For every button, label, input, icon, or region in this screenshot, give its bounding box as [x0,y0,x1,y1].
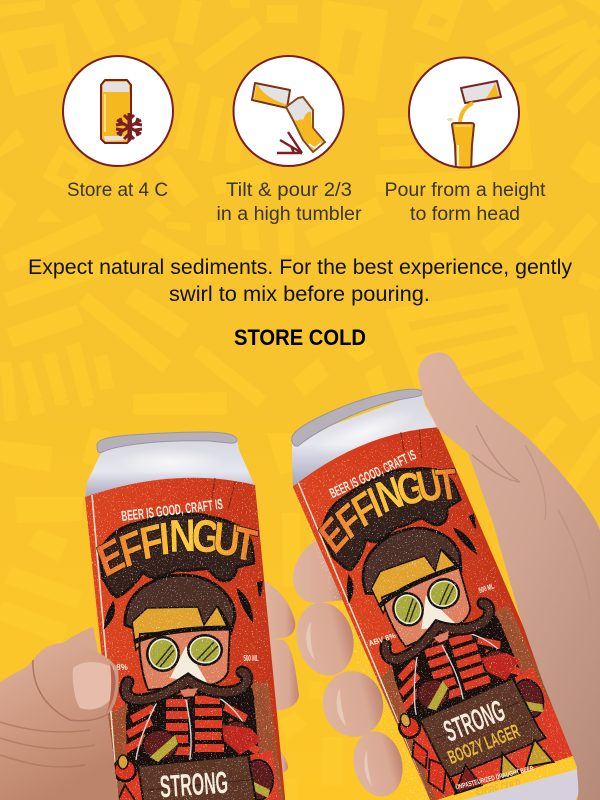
label text: BEER IS GOOD, CRAFT IS [327,447,418,501]
right hand thumb and palm [418,352,600,800]
condensation speckle [80,470,290,800]
label text: ABV 8% [367,631,397,648]
can top silver [292,392,438,488]
label text: STRONG [439,694,510,749]
instruction text: Expect natural sediments. For the best experience, gently [28,256,572,279]
label text [116,497,259,800]
left hand fingers behind can [60,580,299,773]
label text: BOOZY LAGER [445,721,523,769]
can footer text [455,765,538,800]
instruction text [28,256,572,306]
caption: pour from a height [384,180,546,225]
can top highlight [309,400,421,464]
caption: pour from a height: Pour from a height [384,180,546,201]
left hand thumb and palm [0,643,119,800]
can rim [97,432,237,453]
can top silver [85,438,255,499]
thumb nail [73,662,115,709]
icon: store can with snowflake [63,56,173,166]
label text [298,436,544,787]
caption: pour from a height: to form head [410,204,520,225]
can footer text: STORE COLD [474,776,522,800]
caption: store: Store at 4 C [67,180,168,201]
caption: tilt and pour: Tilt & pour 2/3 [226,180,352,201]
heading: store cold: STORE COLD [234,325,366,350]
condensation speckle [290,425,585,800]
icon: pour from a height [409,58,519,172]
caption: tilt and pour [216,180,362,225]
icon: tilt and pour [234,56,344,166]
can label art [85,478,290,800]
can top highlight [115,448,225,476]
left beer can [80,432,290,800]
right beer can [287,389,585,800]
label text: BEER IS GOOD, CRAFT IS [121,497,224,525]
label text: 8% [116,663,128,672]
can rim [292,389,422,446]
label text: 500 ML [244,654,259,663]
caption: tilt and pour: in a high tumbler [216,204,362,225]
instruction text: swirl to mix before pouring. [169,283,430,306]
label text: 500 ML [477,581,495,595]
can label art [287,411,578,800]
brand title: EFFINGUT [91,509,260,587]
can bottom silver [455,769,584,800]
right hand fingers front [289,596,409,800]
right hand finger behind can [293,538,345,603]
brand title: EFFINGUT [302,449,473,568]
can footer text: UNPASTEURIZED DRAUGHT BEER [455,765,534,791]
